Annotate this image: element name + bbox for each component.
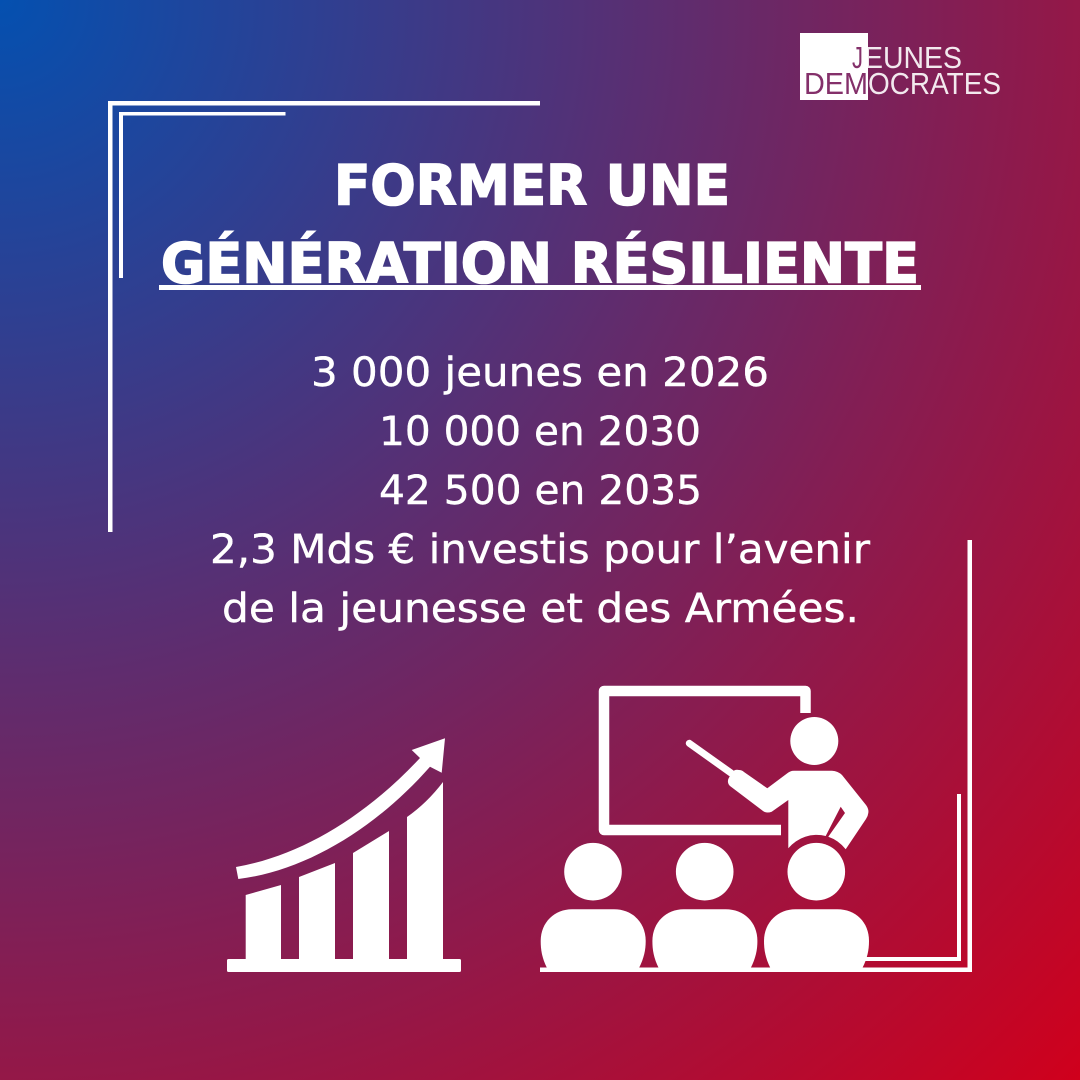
title — [159, 154, 921, 296]
top-left double frame — [108, 101, 540, 532]
board — [604, 691, 806, 830]
logo: Jeunes Democrates: DEM — [804, 66, 868, 101]
logo: Jeunes Democrates — [800, 33, 1001, 101]
body text: key figures: 2,3 Mds € investis pour l’avenir — [210, 527, 871, 573]
body text: key figures: 3 000 jeunes en 2026 — [311, 350, 769, 396]
body text: key figures: de la jeunesse et des Armées. — [222, 586, 859, 632]
logo: Jeunes Democrates: OCRATES — [868, 66, 1001, 101]
body text: key figures: 42 500 en 2035 — [379, 468, 702, 514]
logo: Jeunes Democrates: EUNES — [864, 40, 962, 75]
body text: key figures — [210, 350, 871, 632]
teacher — [689, 717, 868, 849]
icon: teacher at a board with three students — [541, 691, 869, 968]
students — [541, 843, 869, 968]
body text: key figures: 10 000 en 2030 — [379, 409, 701, 455]
icon: rising bar chart with arrow — [227, 738, 461, 972]
logo: Jeunes Democrates: J — [852, 40, 863, 75]
title: GÉNÉRATION RÉSILIENTE — [161, 230, 919, 296]
bottom-right double frame — [540, 540, 972, 972]
title: FORMER UNE — [334, 154, 730, 218]
